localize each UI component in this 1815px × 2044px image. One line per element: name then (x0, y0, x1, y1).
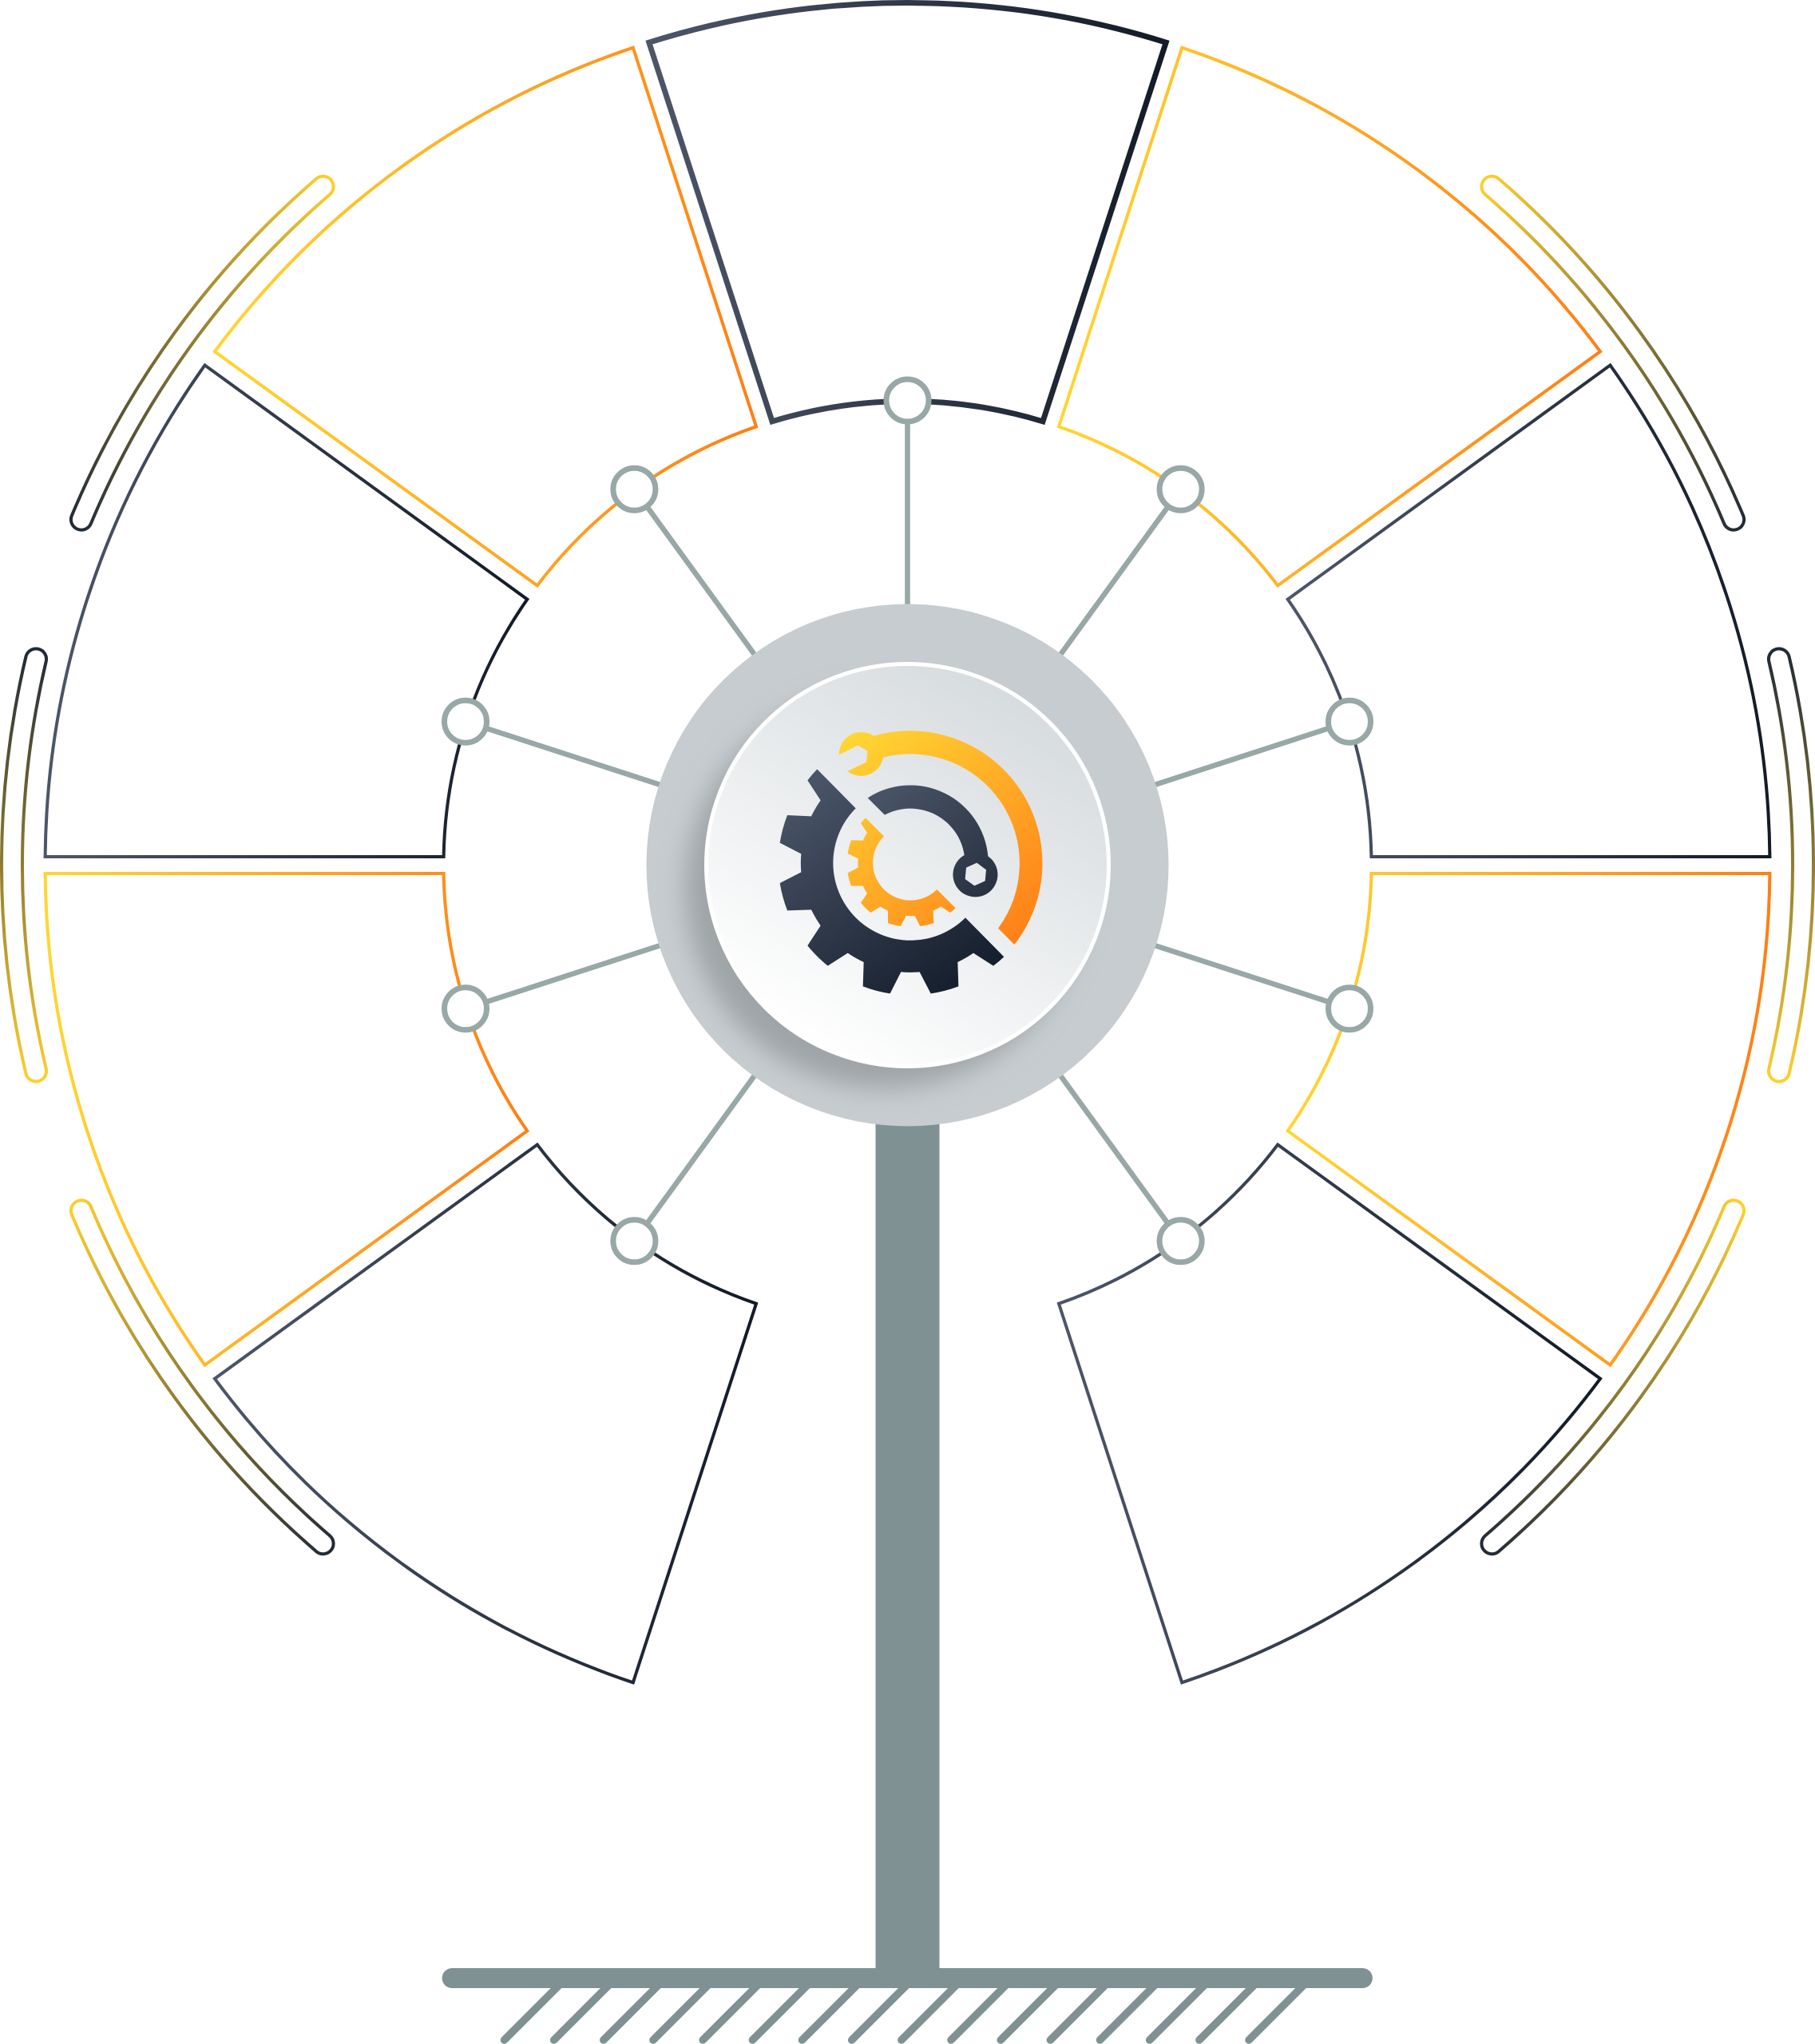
central hub (647, 604, 1169, 1126)
panel: upper right (1059, 48, 1600, 585)
icon: large dark gear (780, 769, 1004, 993)
node: upper left (613, 468, 656, 510)
ground hatching (505, 1980, 1309, 2040)
wheel panels (46, 3, 1769, 1682)
pole (875, 1038, 939, 1976)
node: top (886, 379, 929, 422)
panel: left lower (46, 873, 527, 1365)
stand: pole and base (442, 1038, 1373, 2040)
icon: small yellow gear (848, 818, 956, 926)
node: upper right (1159, 468, 1202, 510)
hub outer ring (647, 604, 1169, 1126)
bracket: middle left (2, 648, 46, 1082)
panel: right lower (1288, 873, 1769, 1365)
panel: right upper (1288, 365, 1769, 857)
panel: top (649, 3, 1166, 422)
node: right upper (1329, 700, 1370, 743)
bracket: upper left (71, 176, 334, 530)
node: lower left (613, 1220, 656, 1262)
node: left upper (444, 700, 487, 743)
bracket: lower right (1481, 1200, 1744, 1554)
icon: dark arc with socket head (868, 785, 997, 897)
node: left lower (444, 988, 487, 1030)
node: right lower (1329, 988, 1370, 1030)
panel: left upper (46, 365, 527, 857)
ground bar (442, 1968, 1373, 1988)
node: lower right (1159, 1220, 1202, 1262)
icon: yellow wrench arc (839, 731, 1042, 945)
bracket: middle right (1769, 648, 1813, 1082)
bracket: lower left (71, 1200, 334, 1554)
icon: gears, wrench and spanner (780, 731, 1042, 993)
bracket: upper right (1481, 176, 1744, 530)
panel: lower left (215, 1145, 756, 1682)
hub disc (706, 664, 1108, 1067)
panel: upper left (215, 48, 756, 585)
spokes (466, 401, 1349, 1241)
outer side brackets (2, 176, 1813, 1554)
spoke nodes (444, 379, 1370, 1262)
hub drop shadow (685, 689, 1084, 1088)
panel: lower right (1059, 1145, 1600, 1682)
